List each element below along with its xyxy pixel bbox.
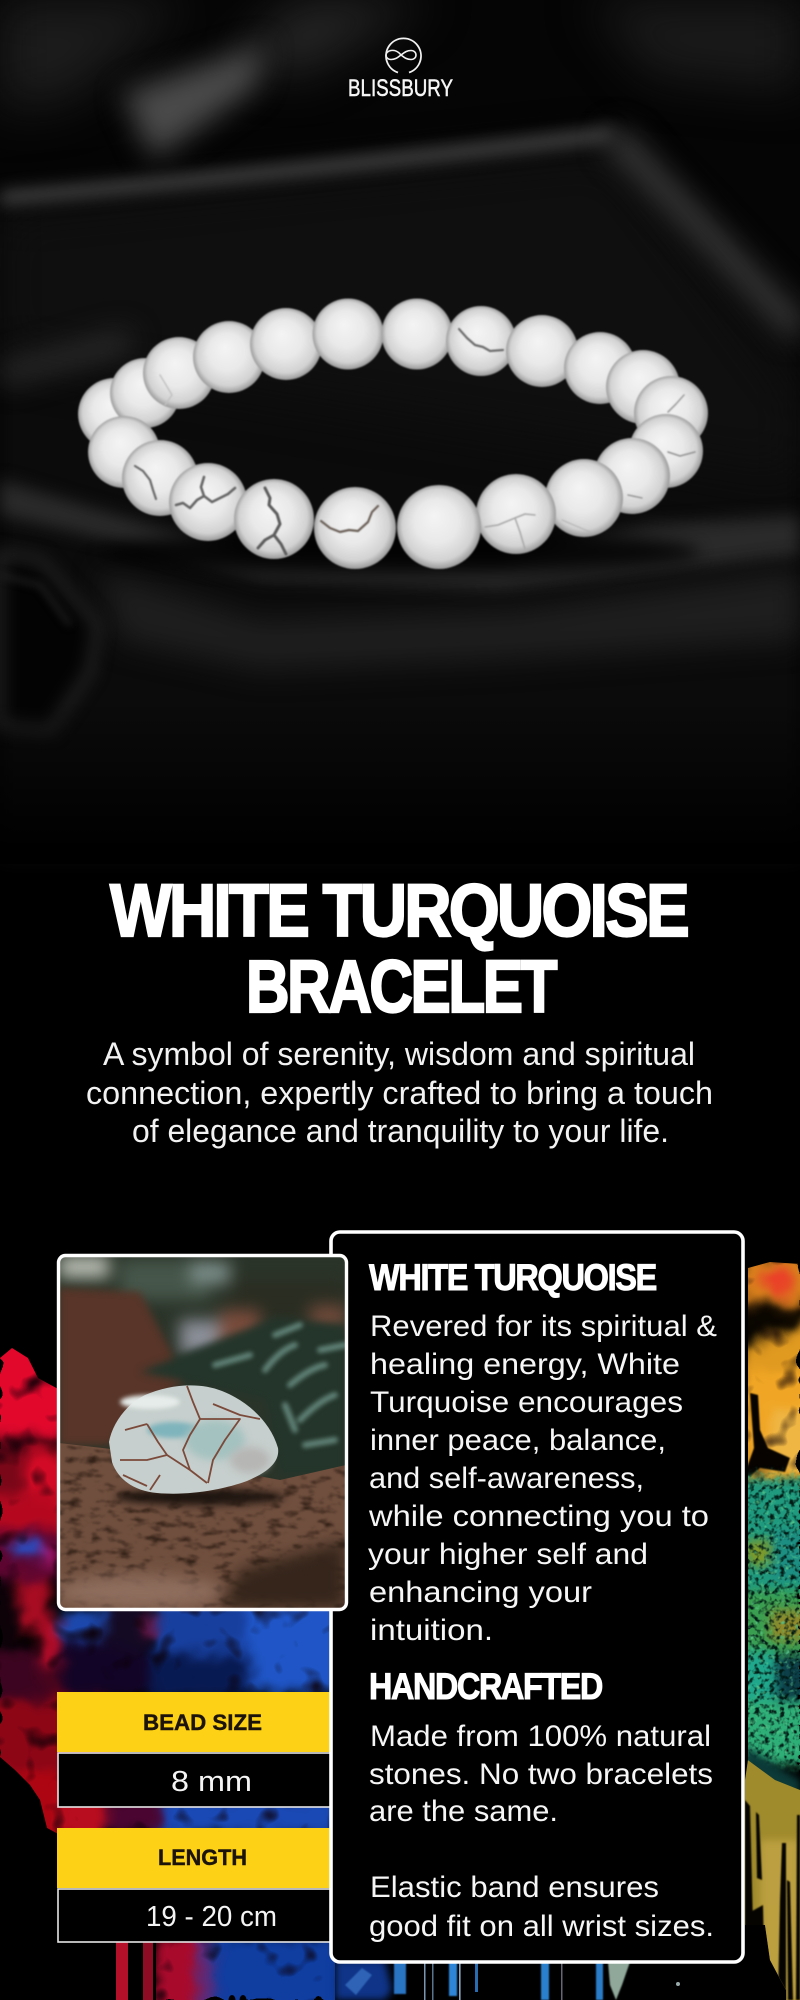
brand logo bbox=[348, 38, 453, 102]
text block: white turquoise description bbox=[368, 1310, 717, 1647]
stat: length bbox=[57, 1828, 331, 1942]
title: WHITE TURQUOISE bbox=[110, 869, 688, 952]
photo: plant leaves bbox=[142, 1318, 345, 1451]
cloth fold at left edge bbox=[0, 554, 97, 730]
title bbox=[110, 869, 688, 1028]
text block: white turquoise description: healing energy, White bbox=[370, 1348, 680, 1381]
red drip streaks bbox=[116, 1942, 246, 2000]
icon: infinity in circle bbox=[386, 38, 421, 72]
text block: handcrafted description bbox=[369, 1720, 714, 1943]
bracelet of white turquoise beads bbox=[78, 298, 708, 574]
text block: handcrafted description: good fit on all wrist sizes. bbox=[369, 1910, 714, 1943]
heading: white turquoise: WHITE TURQUOISE bbox=[369, 1257, 657, 1298]
length value: 19 - 20 cm bbox=[146, 1901, 277, 1933]
text block: white turquoise description: Revered for its spiritual & bbox=[370, 1310, 717, 1343]
bead size label bbox=[57, 1692, 331, 1752]
panel: description bbox=[331, 1232, 743, 1962]
bead size label: BEAD SIZE bbox=[143, 1710, 262, 1735]
bead size value: 8 mm bbox=[171, 1766, 252, 1798]
photo: white turquoise stone bbox=[109, 1385, 278, 1494]
stat: bead size bbox=[57, 1692, 331, 1807]
paint splash: red and blue, left and bottom bbox=[0, 1330, 345, 2000]
text block: white turquoise description: Turquoise encourages bbox=[370, 1386, 683, 1419]
hero photo: black satin cloth bbox=[0, 0, 800, 864]
subtitle: of elegance and tranquility to your life. bbox=[132, 1113, 669, 1149]
photo: soil ground bbox=[59, 1443, 346, 1609]
length value bbox=[58, 1889, 331, 1942]
photo: rock in background bbox=[59, 1288, 185, 1445]
text block: white turquoise description: your higher self and bbox=[368, 1538, 648, 1571]
text block: white turquoise description: enhancing your bbox=[369, 1576, 592, 1609]
text block: white turquoise description: intuition. bbox=[370, 1614, 493, 1647]
text block: handcrafted description: stones. No two bracelets bbox=[369, 1758, 713, 1791]
text block: handcrafted description: Elastic band ensures bbox=[370, 1871, 659, 1904]
subtitle bbox=[86, 1036, 713, 1149]
paint splash: orange, teal and ochre, right side bbox=[745, 1262, 800, 2000]
title: BRACELET bbox=[246, 945, 557, 1028]
subtitle: A symbol of serenity, wisdom and spiritual bbox=[103, 1036, 695, 1072]
length label bbox=[57, 1828, 331, 1888]
text block: white turquoise description: while connecting you to bbox=[368, 1500, 709, 1533]
bead veins bbox=[135, 329, 695, 554]
subtitle: connection, expertly crafted to bring a touch bbox=[86, 1075, 713, 1111]
text block: handcrafted description: are the same. bbox=[369, 1795, 558, 1828]
length label: LENGTH bbox=[158, 1845, 247, 1870]
paint drips: blue, under text panel bbox=[335, 1960, 680, 2000]
text block: white turquoise description: inner peace, balance, bbox=[370, 1424, 666, 1457]
brand logo: BLISSBURY bbox=[348, 75, 453, 102]
text block: handcrafted description: Made from 100% natural bbox=[370, 1720, 711, 1753]
bead size value bbox=[58, 1753, 331, 1807]
heading: handcrafted: HANDCRAFTED bbox=[369, 1666, 603, 1707]
panel: stone photo bbox=[55, 1256, 346, 1610]
black drip streaks bbox=[745, 1800, 800, 2000]
text block: white turquoise description: and self-awareness, bbox=[369, 1462, 644, 1495]
